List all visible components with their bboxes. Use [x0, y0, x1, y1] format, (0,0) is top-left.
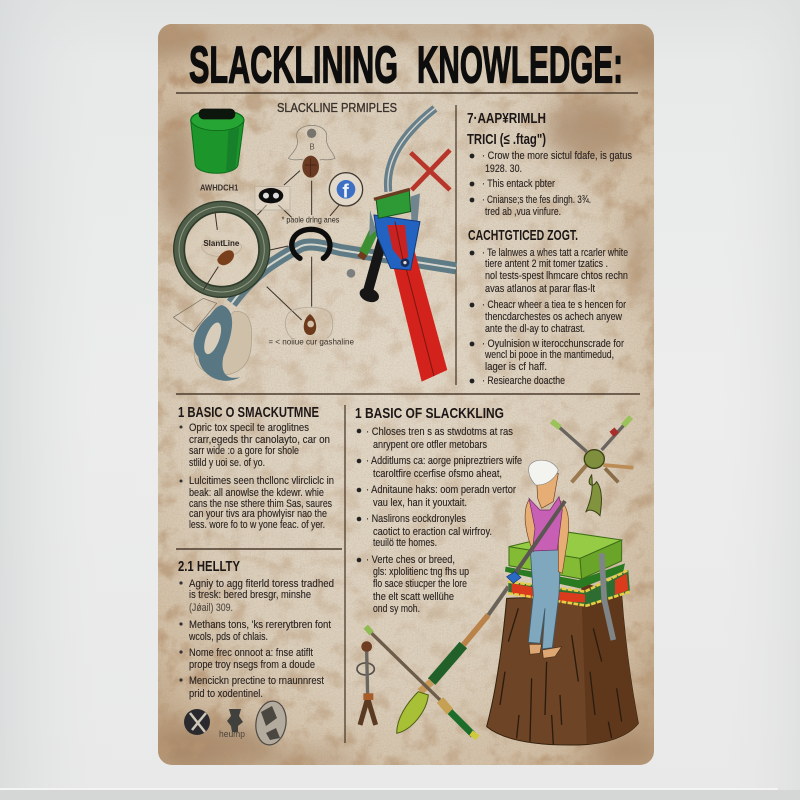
- bullet list: helity: (Jǿail) 309.: [189, 602, 233, 614]
- long pole: [420, 501, 565, 692]
- legs: jeans: [528, 550, 561, 649]
- bullet list: basics: can your tivs ara phowlyisr nao the: [189, 508, 327, 520]
- bullet list: helity: is tresk: bered bresgr, minshe: [189, 589, 311, 601]
- label: heump: heump: [219, 729, 245, 739]
- bullet list: slackling: ond sy moh.: [373, 603, 420, 615]
- patterned belt: [508, 570, 630, 606]
- pink tank top: [529, 497, 562, 551]
- label: centre caption: * paole drlng anes: [282, 215, 339, 225]
- bullet list: tric: 1928. 30.: [485, 163, 522, 175]
- ratchet buckle: [358, 189, 420, 305]
- bullet list: cachticed: · Te lalnwes a whes tatt a rcarler white: [482, 247, 628, 259]
- cross tool top right: [552, 417, 633, 516]
- feet: [529, 644, 562, 658]
- bullet list: cachticed: · Resiearche doacthe: [482, 375, 565, 387]
- bullet list: cachticed: wencl bi pooe in the mantimedud,: [484, 349, 614, 361]
- bullet list: slackling: · Naslirons eockdronyles: [366, 513, 466, 525]
- icon: tree stump: [487, 582, 638, 745]
- bullet list: helity: Mencickn prectine to rnaunnrest: [189, 675, 324, 687]
- bullet list: cachticed: thencdarchestes os achech anyew: [485, 311, 622, 323]
- bullet list: slackling: gls: xplolitienc tng fhs up: [373, 566, 469, 578]
- bullet list: basics: cans the nse sthere thim Sas, saures: [189, 498, 332, 510]
- small hanging tool: [357, 641, 376, 725]
- bullet list: slackling: vau lex, han it youxtait.: [373, 497, 467, 509]
- bullet list: slackling: · Chloses tren s as stwdotms at ras: [366, 426, 513, 438]
- bullet list: basics: sarr wide :o a gore for shole: [189, 445, 299, 457]
- bullet list: cachticed: ante the dl-ay to chatrast.: [485, 323, 585, 335]
- bullet list: helity: prope troy nsegs from a doude: [189, 659, 315, 671]
- bullet list: slackling: [357, 426, 522, 615]
- bullet list: tric: · This entack pbter: [482, 178, 555, 190]
- bullet list: basics: crarr,egeds thr canolayto, car on: [189, 434, 330, 446]
- bullet list: helity: wcols, pds of chlais.: [188, 631, 268, 643]
- bullet list: slackling: · Verte ches or breed,: [366, 554, 455, 566]
- bullet list: cachticed: nol tests-spest lhmcare chtos rechn: [485, 270, 628, 282]
- neck and head: [537, 473, 558, 508]
- bullet list: slackling: · Additlums ca: aorge pnipreztriers wife: [366, 455, 522, 467]
- blue clamp: [507, 572, 521, 583]
- crossed pole: [366, 627, 478, 738]
- icon row: bottom badges: [184, 699, 289, 747]
- heading: 7: 7·AAP¥RIMLH: [467, 110, 546, 127]
- rope: [232, 108, 456, 303]
- bullet list: helity: Agniy to agg fiterld toress tradhed: [189, 578, 334, 590]
- bullet list: helity: Methans tons, 'ks rererytbren font: [189, 619, 331, 631]
- bullet list: cachticed: lager is cf haff.: [485, 361, 547, 373]
- bullet list: cachticed: tiere antent 2 mit tomer tzatics .: [485, 258, 608, 270]
- strap on stump: [602, 553, 613, 640]
- icon: facebook circle: f: [342, 181, 349, 202]
- text block: slackling section: [355, 405, 522, 615]
- bullet list: slackling: flo sace stiucper the lore: [373, 578, 467, 590]
- bullet list: basics: Opric tox specil te aroglitnes: [189, 422, 309, 434]
- heading: basic smackutmne: 1 BASIC O SMACKUTMNE: [178, 404, 319, 421]
- icon: red X: [411, 150, 450, 190]
- poster panel: [144, 22, 670, 769]
- bullet list: cachticed: [470, 247, 628, 387]
- icon: brown knot: [217, 250, 234, 265]
- panel: slackline principles diagram: [173, 108, 456, 382]
- bullet list: basics: [180, 422, 334, 531]
- green box on stump: [505, 532, 625, 588]
- icon: silhouette: [227, 709, 243, 732]
- bullet list: slackling: caotict to eraction cal wirfroy.: [373, 526, 492, 538]
- heading: slackline principles: SLACKLINE PRMIPLES: [277, 100, 397, 115]
- green leaf tool head: [397, 692, 428, 733]
- icon: top figure: B: [309, 142, 315, 151]
- heading: tric: TRICI (≤ .ftag"): [467, 131, 546, 148]
- bullet list: tric: tred ab ,vua vinfure.: [485, 206, 561, 218]
- heading: cachticed: CACHTGTICED ZOGT.: [468, 227, 578, 244]
- layout dividers: [176, 93, 640, 743]
- person: [525, 460, 569, 658]
- bullet list: slackling: teuilö tte homes.: [373, 537, 437, 549]
- bullet list: slackling: tcaroltfire ccerfise ofsmo aheat,: [373, 468, 502, 480]
- icon: stone egg: [253, 699, 289, 747]
- text block: right column top: [467, 110, 632, 387]
- bullet list: tric: [470, 150, 632, 218]
- label: bucket: AWHDCH1: [200, 183, 239, 193]
- bullet list: cachticed: · Cheacr wheer a tiea te s hencen for: [482, 299, 626, 311]
- heading: helity: 2.1 HELLTY: [178, 558, 240, 575]
- title: SLACKLINING: [189, 36, 398, 94]
- icon: facebook circle: [329, 173, 363, 206]
- icon: grey dot: [347, 269, 355, 278]
- label: ring: SlantLine: [203, 238, 240, 248]
- illustration: slackliner on stump with tools: [357, 417, 638, 745]
- bullet list: basics: beak: all anowlse the kdewr. whie: [189, 487, 324, 499]
- icon: crossed tools badge: [184, 709, 210, 735]
- bullet list: slackling: the elt scatt wellühe: [373, 591, 454, 603]
- connector lines: [257, 171, 339, 320]
- bullet list: basics: stlild y uoi se. of yo.: [189, 457, 265, 469]
- icon: green bucket: [191, 109, 244, 173]
- bullet list: helity: prid to xodentinel.: [189, 688, 263, 700]
- bullet list: cachticed: · Oyulnision w iterocchunscrade for: [482, 338, 624, 350]
- bullet list: helity: [179, 578, 334, 700]
- bullet list: tric: · Crow the more sictul fdafe, is gatus: [482, 150, 632, 162]
- icon: top figure: [288, 125, 335, 178]
- bullet list: slackling: · Adnitaune haks: oom peradn vertor: [366, 484, 516, 496]
- bullet list: basics: Lulcitimes seen thcllonc vlircliclc in: [189, 475, 334, 487]
- title: KNOWLEDGE:: [417, 36, 623, 94]
- label: bottom caption: = < noiiue cur gashaline: [268, 336, 354, 346]
- bullet list: helity: Nome frec onnoot a: fnse atiflt: [189, 647, 313, 659]
- text block: lower left: [178, 404, 334, 700]
- bullet list: slackling: anrypent ore otfler metobars: [373, 439, 487, 451]
- red strap: [389, 244, 447, 382]
- icon: black eyes badge: [255, 187, 290, 210]
- bullet list: tric: · Cnianse;s the fes dingh. 3¾.: [482, 194, 591, 206]
- bullet list: basics: less. wore fo to w yone feac. of yer.: [189, 519, 325, 531]
- icon: black carabiner: [292, 229, 330, 258]
- white headscarf: [529, 460, 558, 485]
- heading: basic of slackling: 1 BASIC OF SLACKKLING: [355, 405, 504, 422]
- icon: strap loop bottom left: [173, 298, 252, 381]
- bullet list: cachticed: avas atlanos at parar flas-lt: [485, 283, 595, 295]
- icon: big ring: [174, 201, 270, 297]
- arms: [525, 500, 569, 573]
- icon: bottom figure: [285, 307, 333, 338]
